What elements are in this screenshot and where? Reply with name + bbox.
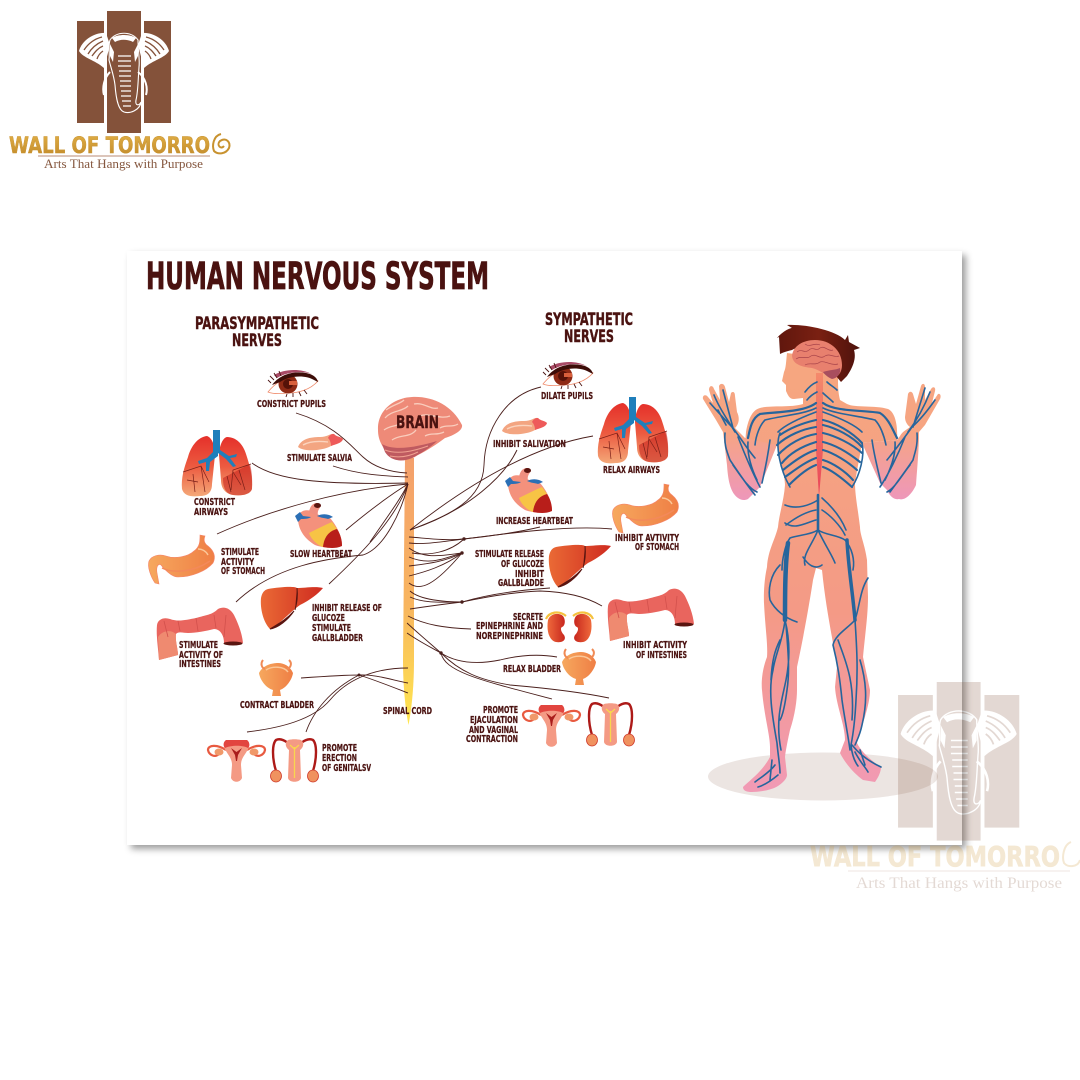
icon: eye, constrict pupils <box>268 370 318 397</box>
label: promote erection: ERECTION <box>322 753 357 764</box>
icon: eye, dilate pupils <box>543 362 593 389</box>
brain label: BRAIN <box>396 413 439 433</box>
poster panel <box>127 251 962 845</box>
label: stimulate activity of intestines <box>179 640 223 670</box>
icon: heart, slow heartbeat <box>295 503 342 548</box>
label: secrete epinephrine <box>476 612 543 642</box>
label: stimulate activity of intestines: ACTIVITY OF <box>179 650 223 661</box>
figure: hair <box>777 325 860 382</box>
label: stimulate salvia: STIMULATE SALVIA <box>287 453 352 464</box>
label: inhibit release of glucose: STIMULATE <box>312 623 351 634</box>
icon: female reproductive organs, left <box>208 740 265 782</box>
figure: spinal cord <box>816 373 823 497</box>
label: increase heartbeat: INCREASE HEARTBEAT <box>496 516 573 527</box>
label: constrict airways <box>194 497 235 518</box>
label: stimulate release of glucose: INHIBIT <box>515 569 544 580</box>
label: inhibit activity of stomach <box>615 533 679 553</box>
label: stimulate activity of intestines: INTESTINES <box>179 659 221 670</box>
icon: intestines, inhibit activity <box>608 589 694 641</box>
label: relax airways: RELAX AIRWAYS <box>603 465 660 476</box>
heading: sympathetic nerves <box>545 310 633 347</box>
label: promote ejaculation <box>466 705 518 745</box>
label: stimulate release of glucose <box>475 549 544 589</box>
watermark: swirl icon <box>1063 842 1080 866</box>
watermark: tagline: Arts That Hangs with Purpose <box>856 875 1062 892</box>
label: stimulate activity of stomach: OF STOMACH <box>221 566 265 577</box>
watermark: elephant mark <box>898 682 1019 841</box>
label: stimulate release of glucose: OF GLUCOZE <box>501 559 544 570</box>
human figure with nervous system <box>703 325 941 792</box>
label: stimulate activity of stomach: ACTIVITY <box>221 557 254 568</box>
logo tagline: Arts That Hangs with Purpose <box>44 157 203 171</box>
heading: parasympathetic nerves: PARASYMPATHETIC <box>195 314 319 334</box>
icon: tongue, stimulate saliva <box>298 434 343 450</box>
label: stimulate activity of stomach: STIMULATE <box>221 547 259 558</box>
icon: heart, increase heartbeat <box>505 468 552 513</box>
label: constrict airways: CONSTRICT <box>194 497 235 508</box>
label: secrete epinephrine: NOREPINEPHRINE <box>476 631 543 642</box>
figure: brain <box>792 340 842 379</box>
label: promote ejaculation: AND VAGINAL <box>469 725 518 736</box>
brain <box>378 397 462 460</box>
heading: sympathetic nerves: NERVES <box>564 327 614 347</box>
label: inhibit activity of intestines: INHIBIT ACTIVITY <box>623 640 687 651</box>
icon: lungs, relax airways <box>598 397 668 463</box>
label: spinal cord: SPINAL CORD <box>383 706 432 717</box>
label: inhibit release of glucose: GLUCOZE <box>312 613 345 624</box>
icon: bladder, relax <box>562 649 596 685</box>
icon: intestines, stimulate activity <box>157 608 243 660</box>
heading: parasympathetic nerves <box>195 314 319 351</box>
heading: sympathetic nerves: SYMPATHETIC <box>545 310 633 330</box>
label: inhibit salivation: INHIBIT SALIVATION <box>493 439 566 450</box>
floor shadow ellipse <box>708 752 938 800</box>
label: inhibit release of glucose: INHIBIT RELEASE OF <box>312 603 382 614</box>
icon: stomach, stimulate activity <box>148 535 214 584</box>
title: HUMAN NERVOUS SYSTEM <box>146 255 489 298</box>
icon: tongue, inhibit salivation <box>502 418 547 434</box>
label: promote erection <box>322 743 371 774</box>
label: relax bladder: RELAX BLADDER <box>503 664 561 675</box>
nerve lines: sympathetic <box>407 387 612 699</box>
logo wordmark: WALL OF TOMORRO <box>9 134 210 159</box>
icon: kidneys with adrenal glands <box>546 612 593 642</box>
label: secrete epinephrine: EPINEPHRINE AND <box>476 621 543 632</box>
heading: parasympathetic nerves: NERVES <box>232 331 282 351</box>
logo rule <box>38 156 210 157</box>
label: constrict airways: AIRWAYS <box>194 507 228 518</box>
label: promote ejaculation: CONTRACTION <box>466 734 518 745</box>
spinal cord <box>403 458 414 725</box>
figure: nerves legs <box>755 540 881 787</box>
label: inhibit activity of intestines <box>623 640 687 661</box>
label: stimulate release of glucose: GALLBLADDE <box>498 578 544 589</box>
watermark logo <box>810 682 1080 892</box>
icon: liver, stimulate release <box>549 545 611 587</box>
logo <box>9 11 229 171</box>
icon: male reproductive organs, left <box>270 739 318 782</box>
icon: female reproductive organs, right <box>523 705 580 747</box>
icon: bladder, contract <box>259 660 293 696</box>
figure: body <box>743 353 897 792</box>
icon: male reproductive organs, right <box>586 703 634 746</box>
label: stimulate activity of intestines: STIMULATE <box>179 640 218 651</box>
label: slow heartbeat: SLOW HEARTBEAT <box>290 549 352 560</box>
label: contract bladder: CONTRACT BLADDER <box>240 700 314 711</box>
figure: right arm and hand <box>862 384 941 499</box>
label: inhibit release of glucose: GALLBLADDER <box>312 633 363 644</box>
label: promote erection: PROMOTE <box>322 743 357 754</box>
label: promote erection: OF GENITALSV <box>322 763 371 774</box>
icon: liver, inhibit release <box>261 587 323 629</box>
label: stimulate activity of stomach <box>221 547 265 577</box>
label: inhibit activity of stomach: OF STOMACH <box>635 542 679 553</box>
label: inhibit activity of stomach: INHIBIT AVTIVITY <box>615 533 679 544</box>
logo mark: elephant <box>77 11 171 133</box>
figure: left arm and hand <box>703 384 777 500</box>
watermark: rule <box>848 870 1070 872</box>
label: promote ejaculation: EJACULATION <box>470 715 518 726</box>
label: constrict pupils: CONSTRICT PUPILS <box>257 399 326 410</box>
icon: stomach, inhibit activity <box>612 484 678 533</box>
label: inhibit release of glucose <box>312 603 382 644</box>
nerve lines: parasympathetic <box>217 413 408 732</box>
figure: nerves torso <box>748 382 897 570</box>
label: dilate pupils: DILATE PUPILS <box>541 391 593 402</box>
figure: nerves arms <box>710 388 935 495</box>
label: secrete epinephrine: SECRETE <box>513 612 543 623</box>
icon: lungs, constrict airways <box>182 430 252 496</box>
logo swirl icon <box>213 134 229 153</box>
label: inhibit activity of intestines: OF INTESTINES <box>636 650 687 661</box>
label: promote ejaculation: PROMOTE <box>483 705 518 716</box>
label: stimulate release of glucose: STIMULATE RELEASE <box>475 549 544 560</box>
